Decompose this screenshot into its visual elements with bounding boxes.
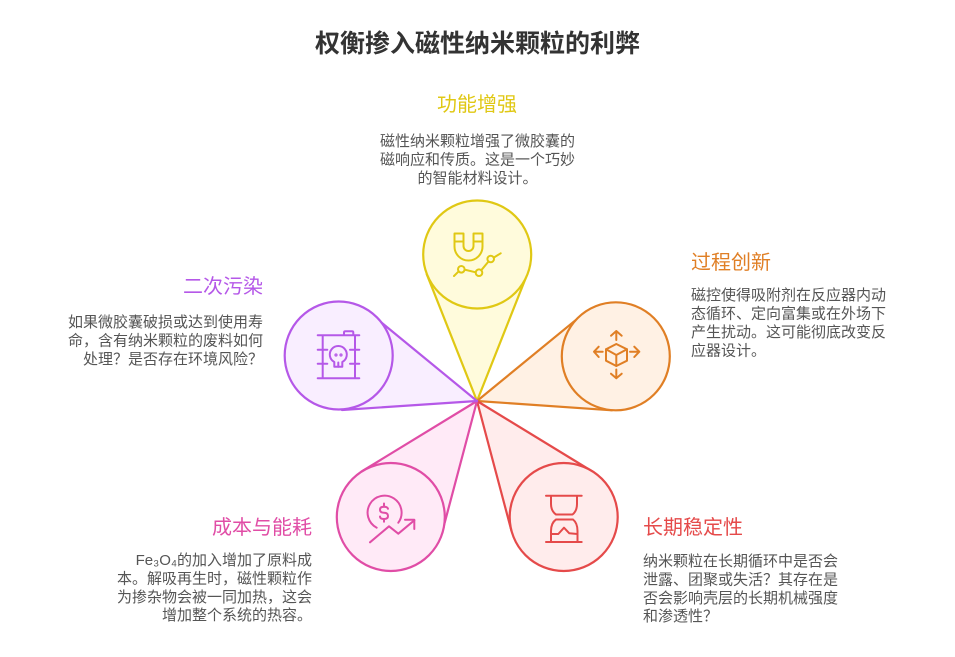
heading: 过程创新 [691,251,771,274]
text block: 为掺杂物会被一同加热，这会 [117,589,312,606]
heading: 成本与能耗 [212,516,312,539]
text block [691,286,886,360]
text block: 应器设计。 [691,342,766,360]
text block: 泄露、团聚或失活？其存在是 [643,572,838,588]
text block: 如果微胶囊破损或达到使用寿 [68,314,263,331]
panel: 成本与能耗 [117,401,477,624]
text block: 命，含有纳米颗粒的废料如何 [68,332,263,350]
text block: 本。解吸再生时，磁性颗粒作 [117,570,312,588]
petal: orange [477,302,670,410]
petal: pink [337,401,477,571]
heading: 长期稳定性 [643,516,743,539]
text block: 和渗透性？ [643,608,718,625]
icon: hourglass [546,496,582,542]
icon: magnet with trend line [454,234,501,276]
panel: 过程创新 [477,251,886,410]
title: 权衡掺入磁性纳米颗粒的利弊 [315,29,640,58]
text block: 否会影响壳层的长期机械强度 [643,590,838,607]
icon: cube with arrows [594,331,639,378]
icon: dollar with rising arrow [368,496,414,542]
text block [380,133,575,187]
panel: 二次污染 [68,275,477,410]
text block: 增加整个系统的热容。 [162,607,312,624]
text block: 态循环、定向富集或在外场下 [691,304,886,322]
text block [643,553,838,625]
text block: 处理？是否存在环境风险？ [83,350,263,368]
text block: 纳米颗粒在长期循环中是否会 [643,553,838,570]
text block: 磁性纳米颗粒增强了微胶囊的 [380,133,575,150]
icon: barrel with skull [318,331,359,378]
text block: 磁控使得吸附剂在反应器内动 [691,286,886,304]
text block: Fe₃O₄的加入增加了原料成 [136,552,312,569]
heading: 二次污染 [183,275,263,298]
text block [68,314,263,368]
petal: yellow [423,200,531,401]
text block [117,552,312,624]
text block: 磁响应和传质。这是一个巧妙 [380,150,575,168]
petal: purple [285,302,477,410]
panel: 长期稳定性 [477,401,838,625]
petal: red [477,401,618,571]
panel: 功能增强 [380,93,575,401]
heading: 功能增强 [437,93,517,116]
text block: 产生扰动。这可能彻底改变反 [691,324,886,341]
text block: 的智能材料设计。 [417,169,538,187]
